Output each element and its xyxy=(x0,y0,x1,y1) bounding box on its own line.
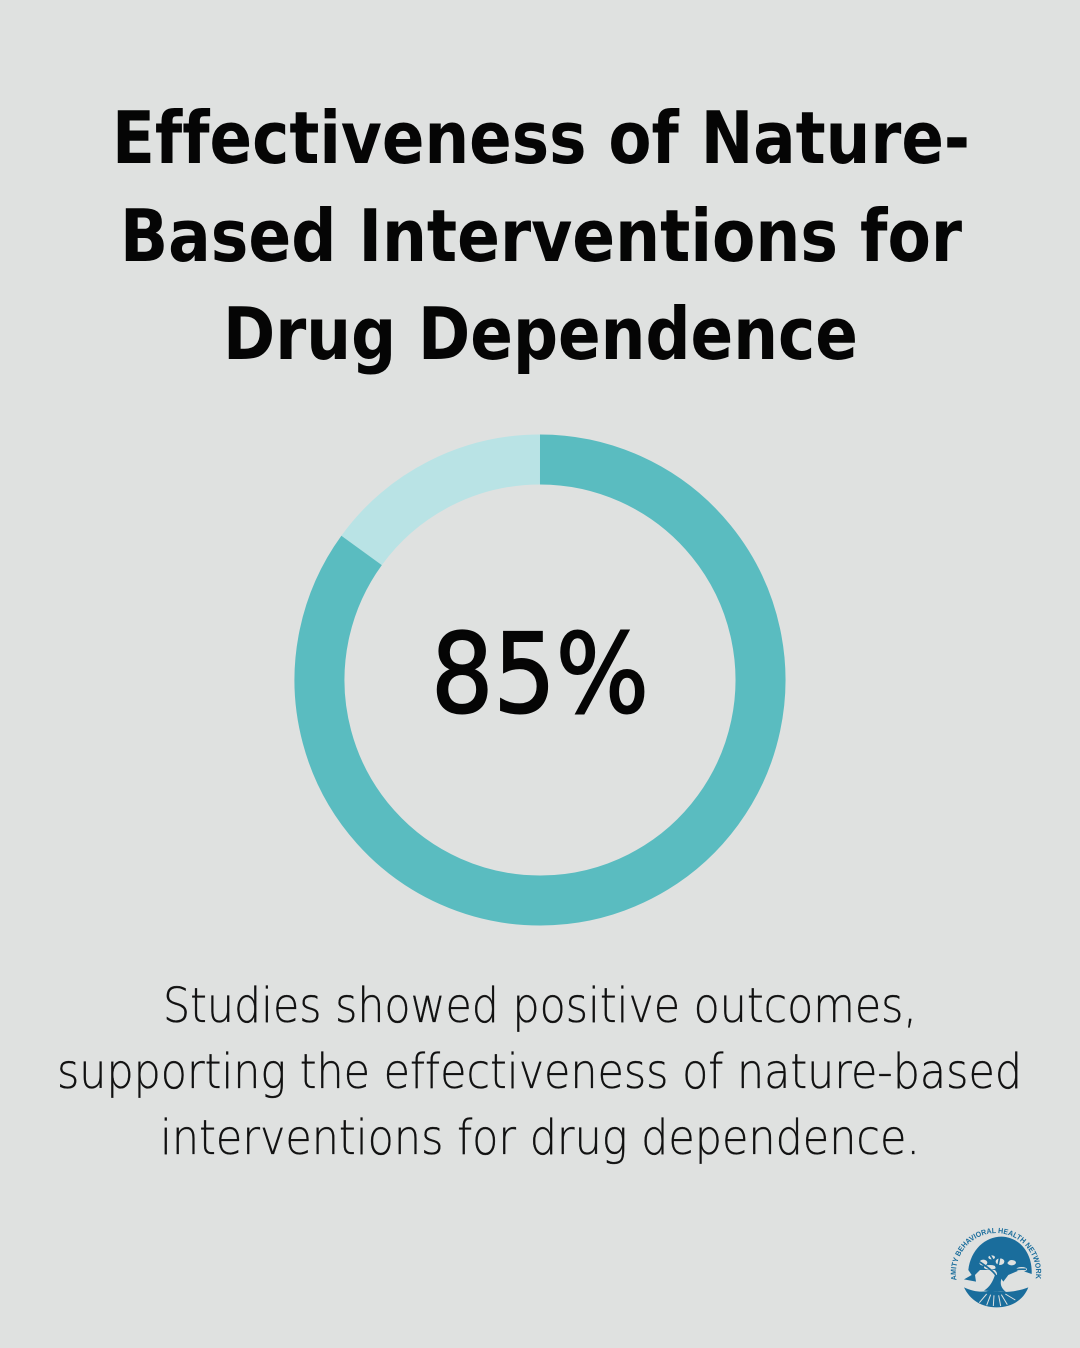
logo: Amity Behavioral Health Network: AMITY BEHAVIORAL HEALTH NETWORK xyxy=(950,1228,1042,1280)
description text: interventions for drug dependence. xyxy=(160,1110,920,1166)
logo roots bowl xyxy=(964,1287,1028,1307)
title: Based Interventions for xyxy=(120,194,962,278)
description text: Studies showed positive outcomes, xyxy=(163,978,917,1034)
logo tree branches xyxy=(979,1255,1026,1283)
title: Drug Dependence xyxy=(223,292,858,376)
donut chart: 85% xyxy=(319,460,760,900)
title xyxy=(112,96,970,376)
logo tree trunk xyxy=(984,1275,1006,1292)
ring remainder segment xyxy=(362,460,540,550)
logo tree canopy xyxy=(964,1237,1032,1282)
logo: Amity Behavioral Health Network xyxy=(950,1228,1042,1308)
title: Effectiveness of Nature- xyxy=(112,96,970,180)
percentage value: 85% xyxy=(431,610,649,738)
logo root lines xyxy=(979,1294,1015,1306)
ring 85% segment xyxy=(319,460,760,900)
logo canopy gaps xyxy=(979,1255,1027,1272)
logo tree xyxy=(964,1237,1032,1307)
description text xyxy=(57,978,1022,1166)
